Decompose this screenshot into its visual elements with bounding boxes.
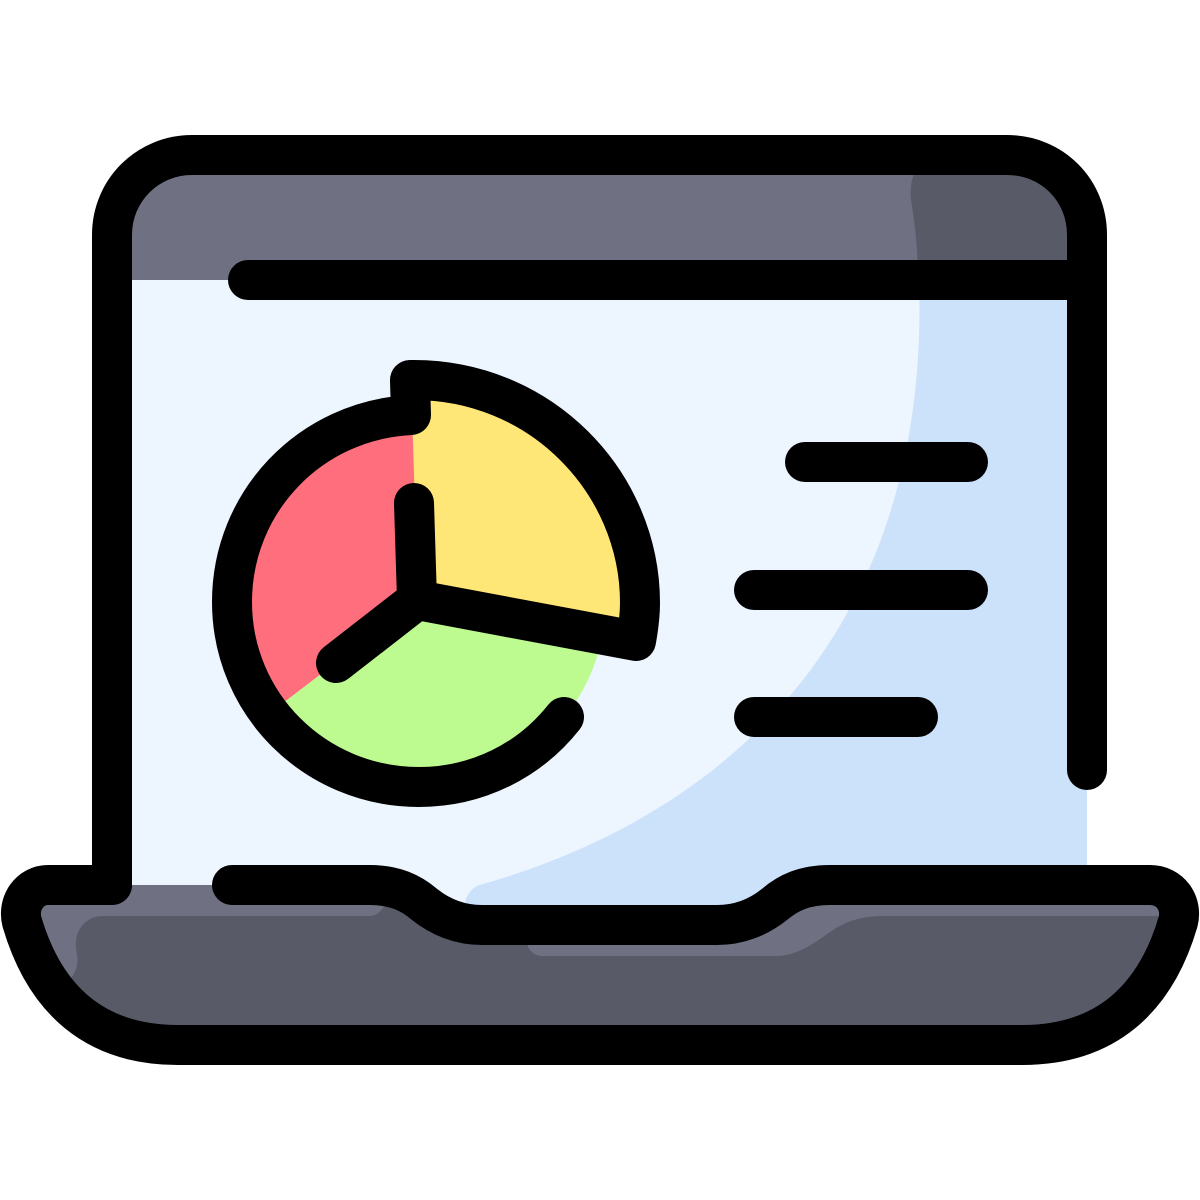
base outline — [21, 885, 1179, 1045]
laptop base — [20, 885, 1179, 1045]
screen title bar — [112, 155, 1087, 280]
screen body — [112, 280, 1087, 925]
title bar line — [248, 260, 1087, 300]
black outlines — [21, 155, 1179, 1045]
laptop lid outline — [112, 155, 1087, 885]
pie outline — [232, 380, 640, 787]
text lines — [805, 442, 968, 482]
pie chart slices — [233, 380, 640, 787]
